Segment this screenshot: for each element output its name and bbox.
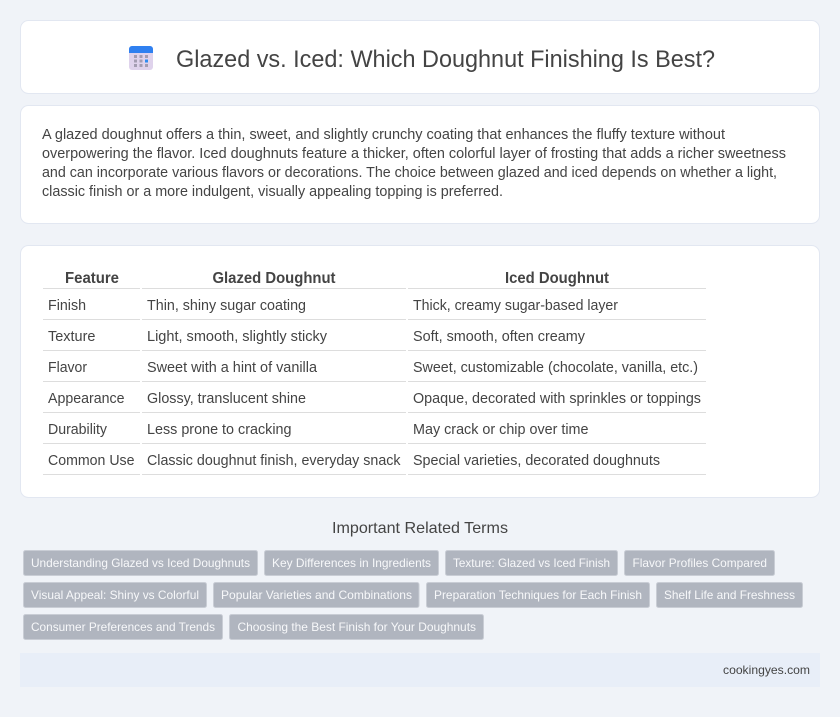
table header: Glazed Doughnut — [212, 270, 336, 287]
panel: related term chips: Choosing the Best Finish for Your Doughnuts — [238, 620, 476, 634]
row: flavor: Sweet with a hint of vanilla — [147, 360, 317, 376]
footer — [20, 653, 820, 687]
panel: related term chips: Flavor Profiles Compared — [632, 556, 767, 570]
row: appearance: Appearance — [48, 391, 124, 407]
row: texture: Soft, smooth, often creamy — [413, 329, 586, 345]
panel: related term chips: Texture: Glazed vs Iced Finish — [453, 556, 610, 570]
row: durability — [48, 422, 588, 438]
row: appearance: Opaque, decorated with sprinkles or toppings — [413, 391, 701, 407]
row: common use: Special varieties, decorated doughnuts — [413, 453, 660, 469]
row: common use: Classic doughnut finish, everyday snack — [147, 453, 401, 469]
footer: cookingyes.com — [723, 663, 810, 677]
row: appearance: Glossy, translucent shine — [147, 391, 306, 407]
panel: related term chips: Visual Appeal: Shiny vs Colorful — [31, 588, 199, 602]
panel: comparison table — [20, 246, 820, 498]
row: texture: Light, smooth, slightly sticky — [147, 329, 328, 345]
row: texture: Texture — [48, 329, 96, 345]
panel: header — [20, 20, 820, 94]
row: finish: Thin, shiny sugar coating — [147, 298, 306, 314]
title: Glazed vs. Iced: Which Doughnut Finishing Is Best? — [176, 46, 715, 73]
row: flavor — [48, 360, 698, 376]
panel: related term chips: Preparation Techniques for Each Finish — [434, 588, 642, 602]
row: finish — [48, 298, 618, 314]
text block: introduction — [42, 127, 786, 200]
text block: introduction: and can incorporate various flavors or decorations. The choice between glazed and iced depends on whether a light, — [42, 165, 777, 181]
row: common use — [48, 453, 660, 469]
text block: introduction: overpowering the flavor. Iced doughnuts feature a thicker, often colorful layer of frosting that adds a richer sweetness — [42, 146, 786, 162]
table header: Feature — [65, 270, 119, 287]
panel: related term chips: Popular Varieties and Combinations — [221, 588, 412, 602]
row: finish: Finish — [48, 298, 86, 314]
panel: related term chips: Key Differences in Ingredients — [272, 556, 431, 570]
panel: related term chips: Consumer Preferences and Trends — [31, 620, 215, 634]
panel: related term chips: Understanding Glazed vs Iced Doughnuts — [31, 556, 250, 570]
row: texture — [48, 329, 586, 345]
table header — [65, 270, 610, 287]
row: appearance — [48, 391, 701, 407]
row: durability: Less prone to cracking — [147, 422, 292, 438]
icon: calendar — [129, 46, 153, 70]
row: durability: Durability — [48, 422, 108, 438]
row: flavor: Sweet, customizable (chocolate, vanilla, etc.) — [413, 360, 698, 376]
text block: introduction: classic finish or a more indulgent, visually appealing topping is preferred. — [42, 184, 503, 200]
table header: Iced Doughnut — [505, 270, 610, 287]
heading: important related terms: Important Related Terms — [332, 520, 508, 537]
row: flavor: Flavor — [48, 360, 87, 376]
text block: introduction: A glazed doughnut offers a thin, sweet, and slightly crunchy coating that enhances the fluffy texture without — [42, 127, 725, 143]
panel: introduction — [20, 106, 820, 224]
row: finish: Thick, creamy sugar-based layer — [413, 298, 618, 314]
panel: related term chips — [24, 550, 802, 640]
row: common use: Common Use — [48, 453, 134, 469]
panel: related term chips: Shelf Life and Freshness — [664, 588, 795, 602]
row: durability: May crack or chip over time — [413, 422, 588, 438]
